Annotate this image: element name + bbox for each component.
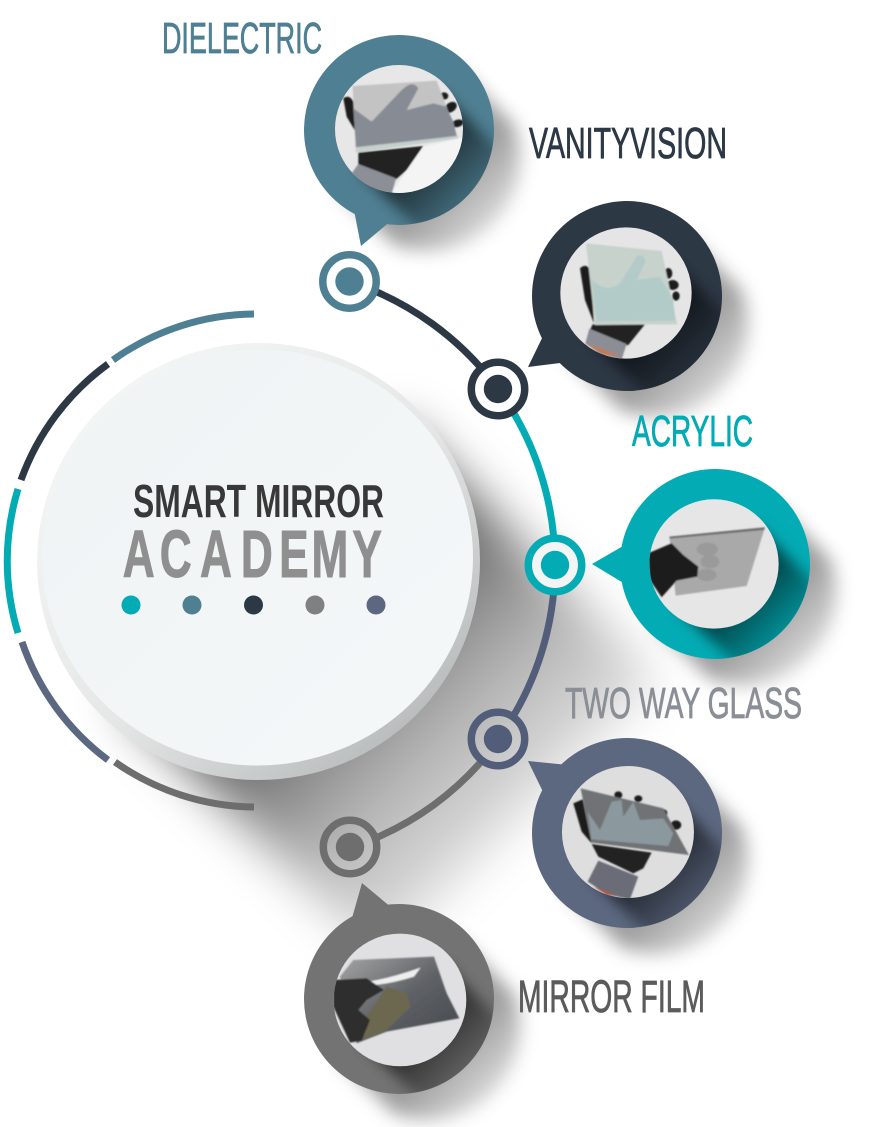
node: vanityvision xyxy=(471,362,525,416)
node: acrylic xyxy=(528,538,582,592)
big circle cast shadow xyxy=(120,420,660,960)
photo: hand holding acrylic sheet xyxy=(648,499,779,629)
five colour dots xyxy=(122,596,386,614)
bubble ring and pointer xyxy=(304,883,494,1094)
bubble ring and pointer xyxy=(528,201,722,391)
central disc with title xyxy=(37,343,480,780)
bubble ring and pointer xyxy=(528,738,722,928)
bubble ring and pointer xyxy=(592,469,810,659)
bubble: mirror film xyxy=(304,883,524,1124)
left segmented ring xyxy=(7,314,254,807)
ring segment: slate blue xyxy=(113,314,254,360)
photo: hand holding vanityvision glass xyxy=(560,227,692,359)
label: mirror film: MIRROR FILM xyxy=(518,971,705,1022)
title: academy: ACADEMY xyxy=(123,518,382,592)
node: two way glass xyxy=(471,712,525,766)
arc: vanityvision to acrylic xyxy=(498,389,555,565)
node: mirror film xyxy=(323,820,377,874)
bubble: two way glass xyxy=(528,738,752,958)
arc: two way glass to mirror film xyxy=(378,763,480,837)
bubble ring and pointer xyxy=(304,35,494,246)
bubble: acrylic xyxy=(592,469,840,689)
ring segment: indigo grey xyxy=(22,642,108,760)
bubble: vanityvision xyxy=(528,201,752,421)
arc: acrylic to two way glass xyxy=(514,565,555,715)
node: dielectric xyxy=(323,255,376,308)
photo: hand holding two way glass xyxy=(562,766,694,899)
label: vanityvision: VANITYVISION xyxy=(529,119,727,168)
ring segment: grey xyxy=(115,762,254,807)
timeline nodes xyxy=(323,255,582,874)
label: acrylic: ACRYLIC xyxy=(632,407,753,456)
bubble: dielectric xyxy=(304,35,524,255)
photo: hand holding mirror film xyxy=(333,934,466,1066)
ring segment: teal xyxy=(7,489,18,633)
ring segment: navy xyxy=(21,364,108,480)
photo: hand holding dielectric glass xyxy=(335,65,467,197)
arc: dielectric to vanityvision xyxy=(350,282,498,389)
timeline connector arcs xyxy=(350,282,555,837)
label: dielectric: DIELECTRIC xyxy=(162,14,322,63)
title: smart mirror: SMART MIRROR xyxy=(133,475,384,527)
